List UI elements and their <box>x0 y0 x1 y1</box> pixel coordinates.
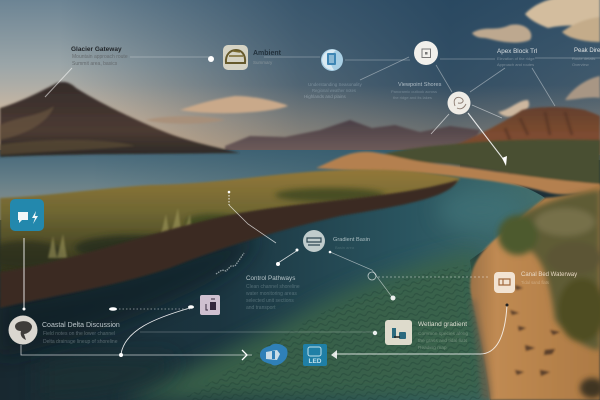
green shallows <box>120 250 490 400</box>
label: Viewpoint: Panoramic outlook across <box>391 89 437 94</box>
icon: white square circle <box>414 41 438 65</box>
label: sky text left <box>304 82 363 99</box>
label: Viewpoint: the ridge and its lakes <box>393 95 432 100</box>
icon: sand tile <box>494 272 515 293</box>
icon: white loop circle <box>448 92 470 114</box>
label: sky text left: Understanding Seasonality <box>308 82 363 87</box>
icon: blue document circle <box>321 49 343 71</box>
dark reflection <box>0 232 253 360</box>
label: Ambient <box>253 50 282 65</box>
label: Control Points: Control Pathways <box>246 275 295 282</box>
far bank with dune <box>316 140 600 194</box>
icon: teal LED tile: LED <box>308 358 322 365</box>
label: Coastal Delta <box>42 322 120 345</box>
far mountains <box>225 120 480 152</box>
label: Control Points: selected unit sections <box>246 298 294 304</box>
label: Canal Waters <box>521 272 577 285</box>
label: Canal Waters: Tidal sand flats <box>521 280 549 285</box>
grass bank <box>0 169 460 278</box>
label: Control Points: water monitoring areas <box>246 291 297 297</box>
label: Coastal Delta: Field notes on the lower channel <box>43 331 115 337</box>
label: Control Points: and transport <box>246 305 276 311</box>
node: Gateway label <box>71 46 128 67</box>
label: sky text left: Regional weather notes <box>312 88 356 93</box>
label: Apex block: Elevation of the ridge <box>497 56 535 61</box>
right dune bushes <box>498 190 600 398</box>
label: Water gradient: Common species along <box>418 331 468 337</box>
red mesa <box>450 107 600 155</box>
label: Water gradient: Wetland gradient <box>418 321 467 328</box>
label: Control Points: Clean channel shoreline <box>246 284 300 290</box>
clouds <box>145 0 600 124</box>
label: Water gradient: Reading map <box>418 345 447 351</box>
icon: purple bag tile <box>200 295 220 315</box>
label: Control Points <box>246 275 300 311</box>
icon: teal tile <box>385 320 412 345</box>
label: Gradient <box>333 237 370 250</box>
left mountain <box>0 82 240 157</box>
sand beach <box>470 184 600 400</box>
lake <box>0 150 460 220</box>
label: Apex block <box>497 48 537 67</box>
label: Apex block: Apex Block Trl <box>497 48 537 55</box>
label: Coastal Delta: Coastal Delta Discussion <box>42 322 120 329</box>
label: Gradient: Basin area <box>335 245 355 250</box>
label: Peak <box>572 48 600 67</box>
river <box>0 174 545 400</box>
connector nodes and arrowheads <box>22 56 508 359</box>
label: Coastal Delta: Delta drainage lineup of shoreline <box>43 339 118 345</box>
connector lines <box>21 57 600 360</box>
label: Viewpoint: Viewpoint Shores <box>398 82 442 88</box>
icon: grey head circle <box>8 316 38 344</box>
label: Ambient: Ambient <box>253 50 282 57</box>
label: Peak: Route details <box>572 56 595 61</box>
icon: stacked circle <box>303 230 325 252</box>
label: sky text left: Highlands and plains <box>304 94 347 99</box>
sky <box>0 0 600 160</box>
label: Viewpoint <box>391 82 442 100</box>
scribble icon <box>216 253 244 274</box>
label: Apex block: Approach and routes <box>497 62 534 67</box>
node: Gateway label: Glacier Gateway <box>71 46 122 53</box>
icon: backpack tile <box>223 45 248 70</box>
icon: blue cloud <box>260 344 288 365</box>
node: Gateway label: Mountain approach route <box>72 54 128 60</box>
label: Water gradient <box>418 321 468 351</box>
muddy shoreline <box>0 180 458 308</box>
label: Ambient: Summary <box>253 60 273 65</box>
label: Gradient: Gradient Basin <box>333 237 370 243</box>
label: Peak: Overview <box>572 62 589 67</box>
icon: chat and bolt tile <box>10 199 44 231</box>
label: Canal Waters: Canal Bed Waterway <box>521 272 577 278</box>
node: Gateway label: Summit area, basics <box>72 61 118 67</box>
icon: teal LED tile <box>303 344 327 366</box>
label: Water gradient: the grass and tidal flats <box>418 338 468 344</box>
